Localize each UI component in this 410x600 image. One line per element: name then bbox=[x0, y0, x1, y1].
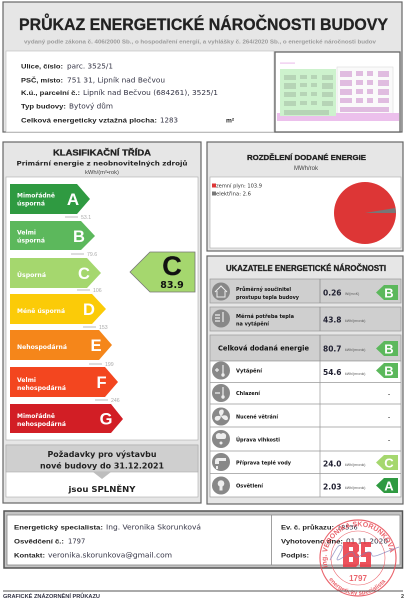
row: heat transfer coefficient: Průměrný součinitel bbox=[236, 286, 291, 293]
title: PRŮKAZ ENERGETICKÉ NÁROČNOSTI BUDOVY bbox=[19, 14, 389, 34]
energy bar G: G bbox=[100, 410, 112, 428]
row: heating: Vytápění bbox=[236, 368, 262, 374]
legend: zemní plyn: 103.9 bbox=[216, 182, 262, 190]
threshold 246: 246 bbox=[111, 398, 120, 404]
energy bar A bbox=[10, 184, 90, 214]
row: hot water: C bbox=[384, 456, 394, 470]
row: heat demand bbox=[210, 307, 401, 331]
stamp: energetický specialista bbox=[330, 578, 386, 596]
row: heat transfer coefficient: W/(m²•K) bbox=[345, 292, 359, 296]
energy bar G bbox=[10, 404, 123, 433]
energy bar E: Nehospodárná bbox=[17, 344, 67, 351]
panel: address: Bytový dům bbox=[69, 102, 113, 110]
energy bar E bbox=[10, 330, 112, 360]
panel: specialist: Ing. Veronika Skorunková bbox=[106, 524, 201, 532]
panel: address: Lipník nad Bečvou (684261), 3525/1 bbox=[83, 89, 218, 97]
row: hot water: kWh/(m²•rok) bbox=[345, 463, 365, 467]
panel: address: Typ budovy: bbox=[21, 104, 66, 110]
panel: specialist: Kontakt: bbox=[14, 552, 45, 560]
panel: delivered energy: MWh/rok bbox=[294, 166, 319, 172]
threshold 79.6: 79.6 bbox=[87, 252, 97, 258]
requirements box bbox=[6, 445, 198, 497]
stamp: 1797 bbox=[349, 574, 367, 583]
heading: indicators: UKAZATELE ENERGETICKÉ NÁROČNOSTI bbox=[226, 264, 386, 273]
threshold 199: 199 bbox=[105, 362, 114, 368]
stamp bbox=[319, 519, 397, 597]
panel: address: 751 31, Lipník nad Bečvou bbox=[67, 76, 165, 84]
panel: classification bbox=[3, 142, 201, 503]
row: heating: kWh/(m²•rok) bbox=[345, 372, 365, 376]
heading: classification: KLASIFIKAČNÍ TŘÍDA bbox=[53, 146, 151, 158]
threshold 153: 153 bbox=[99, 325, 108, 331]
energy bar F: nehospodárná bbox=[17, 385, 66, 392]
threshold 106: 106 bbox=[93, 288, 102, 294]
panel: classification: kWh/(m²•rok) bbox=[85, 170, 119, 176]
footer bbox=[3, 591, 404, 600]
panel: address: PSČ, místo: bbox=[21, 76, 63, 84]
row: forced ventilation: - bbox=[388, 415, 390, 421]
energy bar F: F bbox=[96, 374, 107, 392]
pie chart bbox=[334, 182, 396, 244]
energy bar G: nehospodárná bbox=[17, 421, 66, 428]
row: cooling bbox=[212, 384, 390, 402]
panel: specialist: Energetický specialista: bbox=[14, 524, 103, 532]
row: lighting: A bbox=[384, 478, 394, 494]
row: humidity: - bbox=[388, 438, 390, 444]
row: lighting: 2.03 bbox=[323, 482, 342, 492]
row: humidity bbox=[212, 430, 390, 448]
building class marker C bbox=[130, 251, 195, 292]
threshold 153 bbox=[83, 325, 108, 331]
requirements box: jsou SPLNĚNY bbox=[67, 485, 136, 494]
row: total delivered energy: kWh/(m²•rok) bbox=[345, 348, 365, 352]
row: heat transfer coefficient: prostupu tepla budovy bbox=[236, 295, 300, 301]
row: heat transfer coefficient: 0.26 bbox=[323, 288, 342, 298]
row: lighting: Osvětlení bbox=[236, 482, 263, 490]
row: humidity: Úprava vlhkosti bbox=[236, 436, 280, 444]
row: heat demand: 43.8 bbox=[323, 316, 342, 324]
threshold 246 bbox=[95, 398, 120, 404]
row: lighting bbox=[212, 476, 398, 494]
energy bar C: C bbox=[78, 265, 90, 283]
energy bar F: Velmi bbox=[17, 377, 36, 384]
row: lighting: kWh/(m²•rok) bbox=[345, 486, 365, 490]
energy bar F bbox=[10, 367, 118, 397]
rows: white services bbox=[210, 361, 401, 497]
energy bar D: Méně úsporná bbox=[17, 308, 65, 315]
subtitle: vydaný podle zákona č. 406/2000 Sb., o hospodaření energií, a vyhlášky č. 264/2020 Sb., o energetické náročnosti budov bbox=[24, 40, 376, 46]
energy bar D bbox=[10, 294, 106, 324]
panel: address: Ulice, číslo: bbox=[21, 64, 63, 70]
stamp: Ing. VERONIKA SKORUNKOVÁ bbox=[322, 522, 396, 568]
signature bbox=[330, 545, 399, 560]
row: heat demand: kWh/(m²•rok) bbox=[345, 319, 365, 323]
row: hot water: 24.0 bbox=[323, 460, 342, 468]
panel: indicators bbox=[207, 256, 403, 504]
legend bbox=[212, 182, 262, 198]
panel: address: 1283 bbox=[160, 116, 178, 124]
panel: specialist: Podpis: bbox=[281, 552, 309, 560]
energy bar C bbox=[10, 258, 101, 288]
panel: address: parc. 3525/1 bbox=[67, 62, 113, 70]
row: total delivered energy bbox=[210, 335, 401, 361]
energy bar A: úsporná bbox=[17, 200, 45, 208]
requirements box: Požadavky pro výstavbu bbox=[48, 450, 156, 459]
subheading: Primární energie z neobnovitelných zdrojů bbox=[16, 158, 188, 168]
row: heating bbox=[212, 362, 398, 380]
panel: address: Celková energeticky vztažná plocha: bbox=[21, 118, 157, 124]
row: hot water bbox=[212, 453, 398, 471]
row: cooling: - bbox=[388, 392, 390, 398]
panel: address: K.ú., parcelní č.: bbox=[21, 90, 80, 97]
energy bar G: Mimořádně bbox=[17, 413, 55, 420]
energy bar D: D bbox=[83, 301, 95, 319]
threshold 199 bbox=[89, 362, 114, 368]
building class marker C: 83.9 bbox=[160, 280, 184, 291]
panel: address: m² bbox=[226, 118, 235, 124]
heading: delivered energy: ROZDĚLENÍ DODANÉ ENERGIE bbox=[247, 153, 366, 162]
panel: specialist: 01.11.2020 bbox=[346, 538, 388, 546]
row: forced ventilation: Nucené větrání bbox=[236, 414, 278, 420]
panel: specialist bbox=[4, 511, 402, 568]
footer: 2 bbox=[401, 594, 404, 600]
row: total delivered energy: Celková dodaná energie bbox=[218, 344, 309, 352]
row: cooling: Chlazení bbox=[236, 390, 260, 397]
threshold 106 bbox=[77, 288, 102, 294]
row: heat demand: na vytápění bbox=[236, 320, 269, 328]
energy bar A: A bbox=[67, 190, 79, 209]
footer: GRAFICKÉ ZNÁZORNĚNÍ PRŮKAZU bbox=[3, 592, 100, 600]
panel: header and building info bbox=[3, 2, 402, 132]
panel: specialist: veronika.skorunkova@gmail.com bbox=[48, 552, 172, 560]
energy bar B: B bbox=[73, 228, 85, 246]
energy bar E: E bbox=[90, 337, 102, 355]
panel: specialist: Ev. č. průkazu: bbox=[281, 524, 334, 532]
legend: elektřina: 2.6 bbox=[216, 190, 251, 198]
row: heating: 54.6 bbox=[323, 368, 342, 377]
threshold 53.1 bbox=[65, 215, 91, 221]
panel: specialist: Vyhotoveno dne: bbox=[281, 538, 343, 546]
row: heat demand: Měrná potřeba tepla bbox=[236, 313, 294, 320]
image: building elevation bbox=[275, 52, 400, 132]
threshold 53.1: 53.1 bbox=[81, 215, 91, 221]
threshold 79.6 bbox=[71, 252, 97, 258]
panel: specialist: Osvědčení č.: bbox=[14, 538, 64, 546]
row: total delivered energy: 80.7 bbox=[323, 344, 342, 354]
row: forced ventilation bbox=[212, 408, 390, 426]
panel: delivered energy bbox=[207, 142, 403, 251]
row: total delivered energy: B bbox=[384, 342, 394, 356]
energy bar C: Úsporná bbox=[17, 272, 46, 279]
row: heat transfer coefficient bbox=[210, 279, 401, 303]
panel: specialist: 1797 bbox=[68, 538, 85, 546]
energy bar B: Velmi bbox=[17, 230, 36, 236]
energy bar B: úsporná bbox=[17, 238, 45, 244]
requirements box: nové budovy do 31.12.2021 bbox=[40, 462, 164, 470]
row: heating: B bbox=[384, 364, 394, 378]
panel: address bbox=[6, 51, 274, 132]
row: hot water: Příprava teplé vody bbox=[236, 460, 292, 466]
energy bar B bbox=[10, 221, 95, 250]
building class marker C: C bbox=[162, 251, 182, 281]
energy bar A: Mimořádně bbox=[17, 192, 55, 200]
row: heat transfer coefficient: B bbox=[384, 286, 394, 300]
panel: specialist: 18536 bbox=[337, 524, 358, 532]
